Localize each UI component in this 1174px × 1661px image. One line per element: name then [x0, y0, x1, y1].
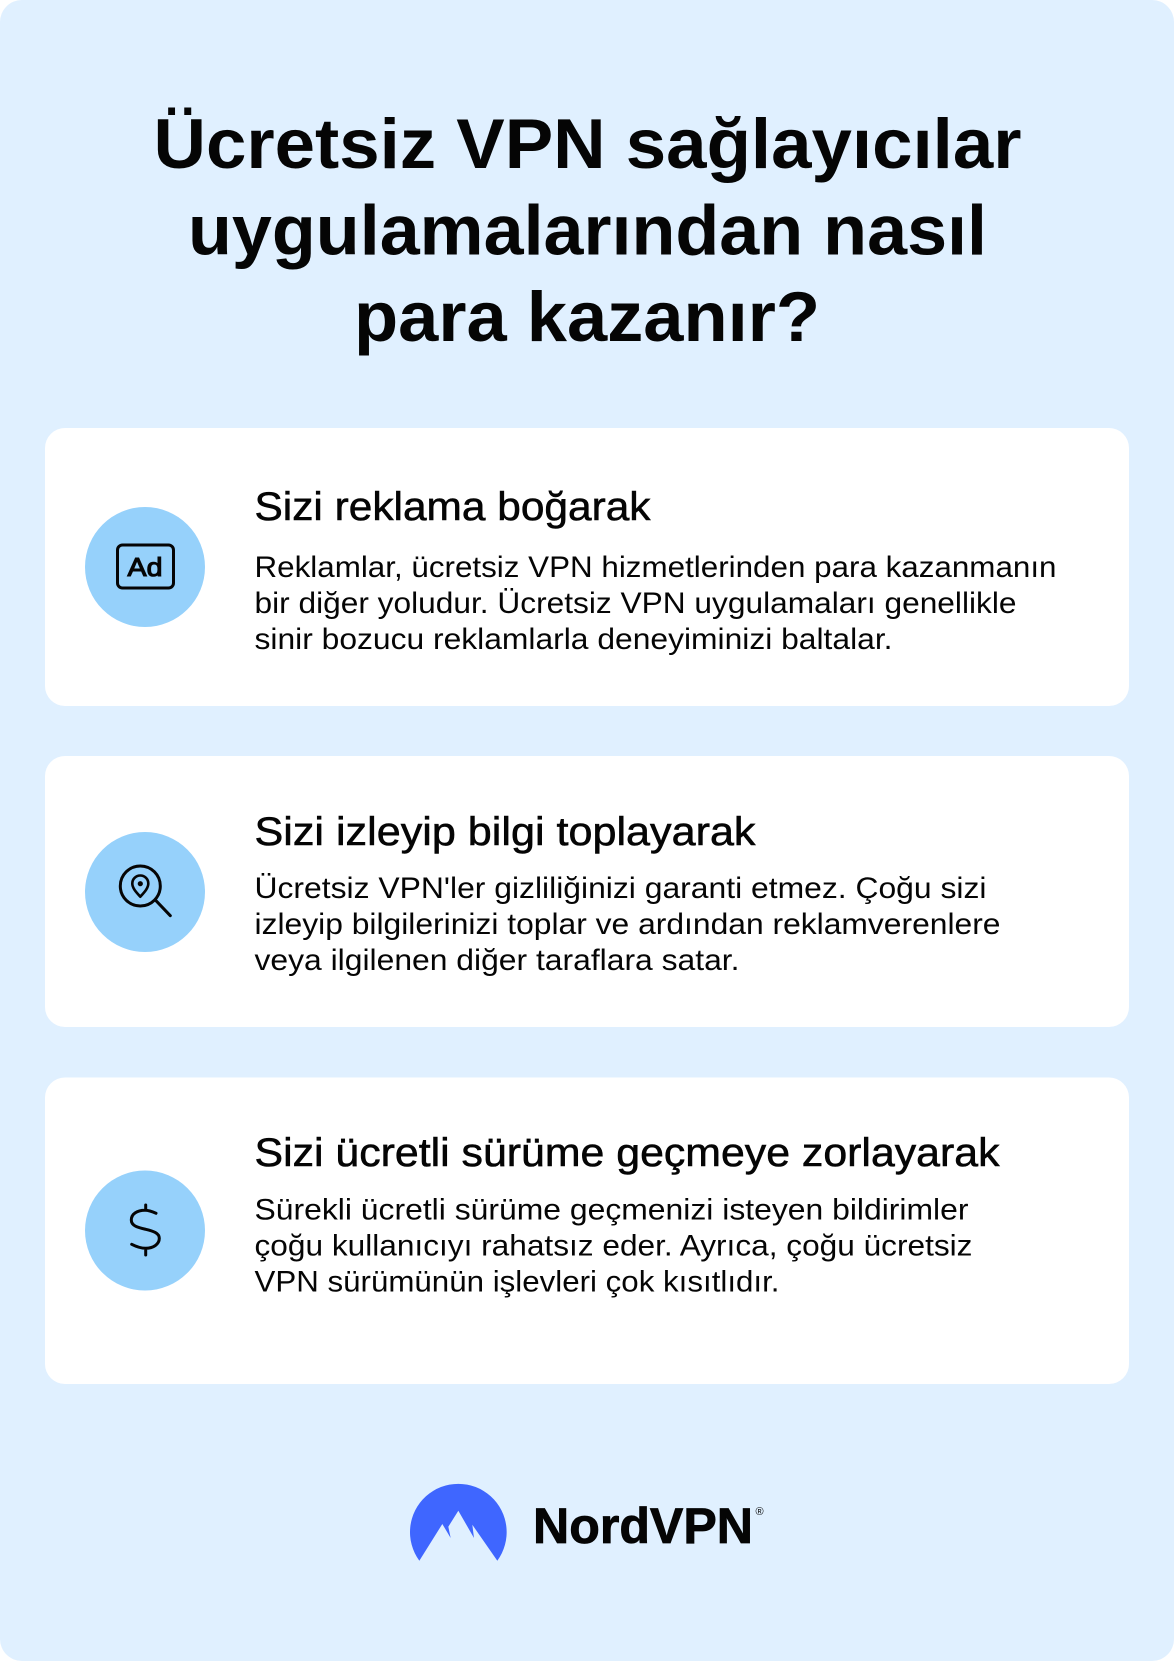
- title: uygulamalarından nasıl: [188, 190, 987, 270]
- icon circle: location search: [85, 832, 205, 952]
- body text 3: Sürekli ücretli sürüme geçmenizi isteyen bildirimler: [254, 1194, 969, 1226]
- body text 1: sinir bozucu reklamlarla deneyiminizi baltalar.: [254, 623, 892, 656]
- body text 1: Reklamlar, ücretsiz VPN hizmetlerinden para kazanmanın: [254, 551, 1056, 584]
- wordmark: NordVPN: [533, 1497, 753, 1554]
- body text 3: [254, 1194, 972, 1298]
- title: para kazanır?: [354, 277, 820, 356]
- body text 2: veya ilgilenen diğer taraflara satar.: [254, 944, 740, 977]
- body text 1: bir diğer yoludur. Ücretsiz VPN uygulamaları genellikle: [254, 587, 1016, 620]
- card background 1: [45, 428, 1129, 706]
- card background 2: [45, 756, 1129, 1027]
- title: Ücretsiz VPN sağlayıcılar: [154, 104, 1022, 183]
- heading 2: Sizi izleyip bilgi toplayarak: [254, 810, 756, 854]
- icon: mountain logo mark: [410, 1484, 507, 1561]
- icon circle: dollar: [85, 1170, 205, 1290]
- body text 2: [254, 872, 1000, 977]
- icon circle: ad: Ad: [128, 552, 162, 582]
- body text 3: çoğu kullanıcıyı rahatsız eder. Ayrıca, çoğu ücretsiz: [254, 1230, 972, 1262]
- icon circle: ad: [85, 507, 205, 627]
- card background 3: [45, 1078, 1129, 1384]
- panel: sizi izleyip bilgi toplayarak: [45, 756, 1129, 1027]
- body text 1: [254, 551, 1056, 656]
- panel: sizi reklama boğarak: [45, 428, 1129, 706]
- logo: NordVPN: [410, 1484, 764, 1561]
- body text 3: VPN sürümünün işlevleri çok kısıtlıdır.: [254, 1266, 780, 1298]
- heading 1: Sizi reklama boğarak: [254, 485, 651, 529]
- body text 2: Ücretsiz VPN'ler gizliliğinizi garanti etmez. Çoğu sizi: [254, 872, 986, 905]
- panel: sizi ücretli sürüme geçmeye zorlayarak: [45, 1078, 1129, 1384]
- registered mark: ®: [756, 1506, 764, 1518]
- title: [154, 104, 1022, 356]
- body text 2: izleyip bilgilerinizi toplar ve ardından reklamverenlere: [254, 908, 1000, 941]
- heading 3: Sizi ücretli sürüme geçmeye zorlayarak: [254, 1131, 1000, 1175]
